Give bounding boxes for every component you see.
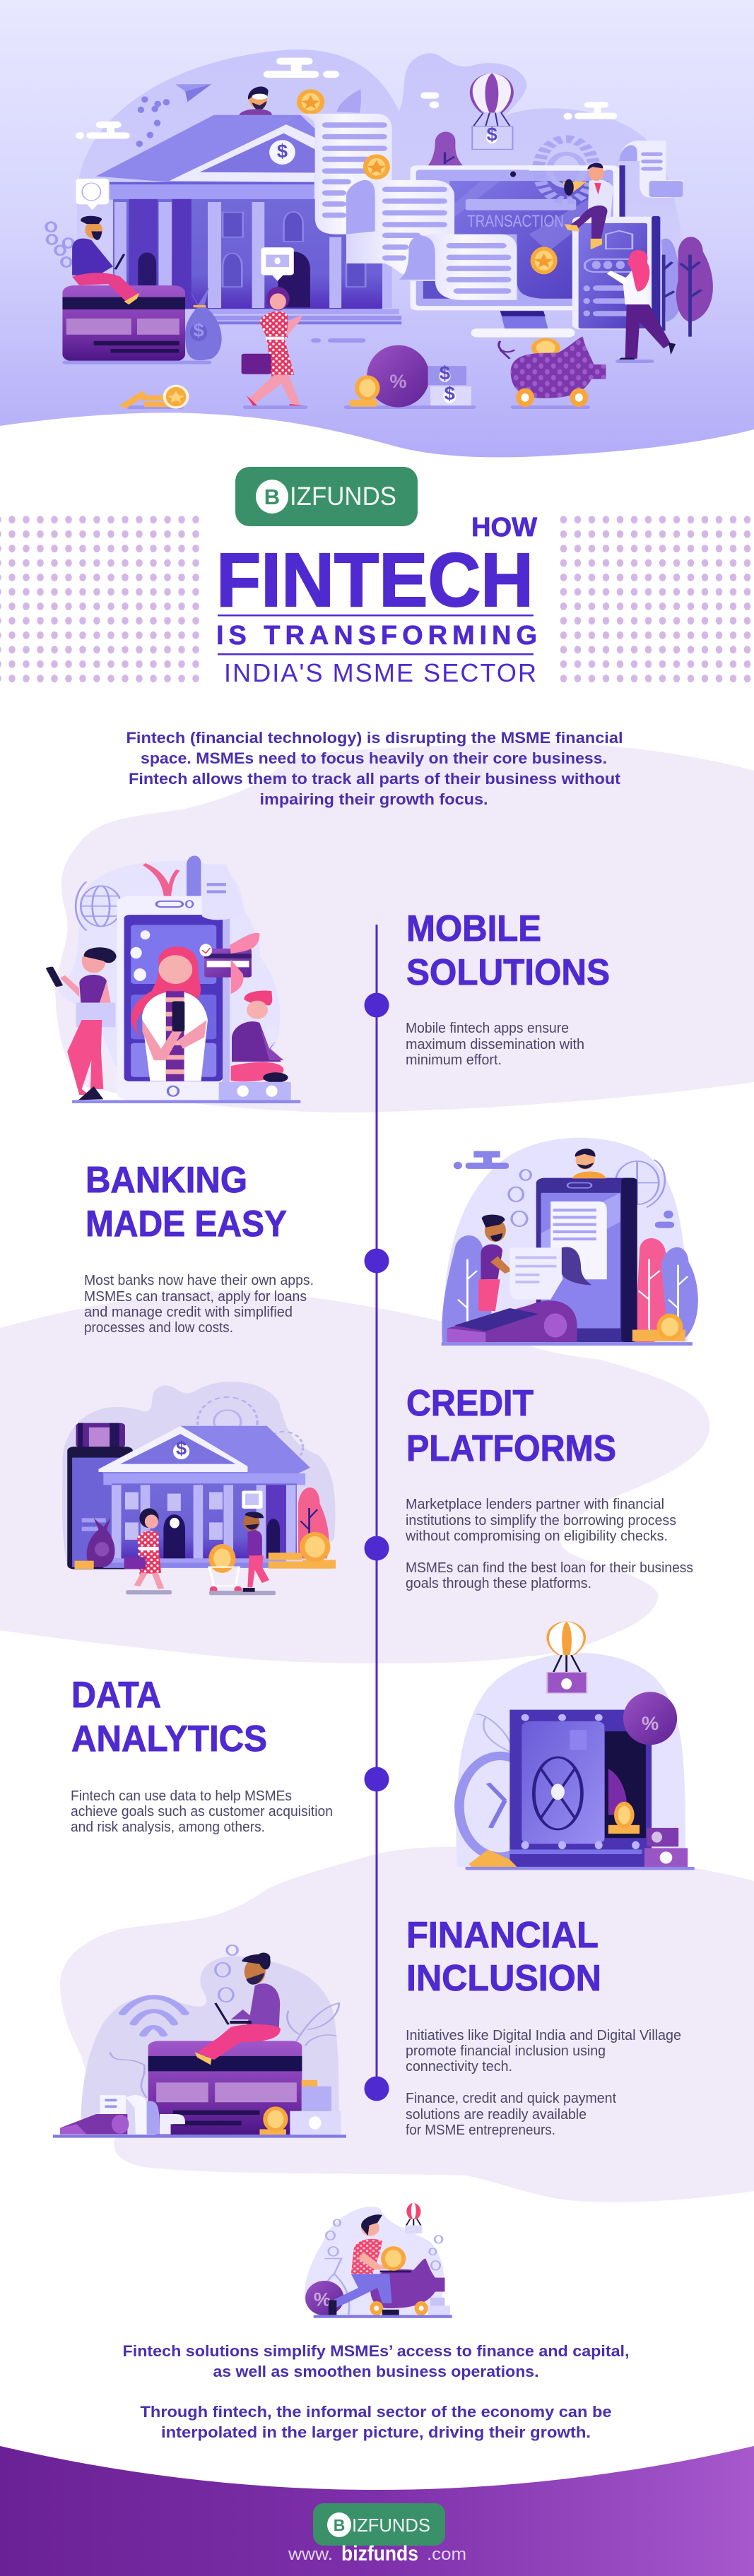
intro text: [126, 729, 623, 808]
heading: credit platforms: [406, 1383, 616, 1469]
intro text: space. MSMEs need to focus heavily on their core business.: [141, 749, 607, 767]
text: credit platforms: MSMEs can find the best loan for their business: [406, 1560, 693, 1576]
logo: Bizfunds: IZFUNDS: [290, 482, 396, 511]
phone: [572, 216, 660, 329]
backdrop dome: [456, 1653, 685, 1867]
heading: financial inclusion: [406, 1915, 601, 1999]
scroll 2: [346, 180, 454, 278]
dot pattern left: [0, 514, 203, 689]
bubble: cash: [261, 247, 294, 281]
white wave: [0, 412, 754, 468]
trees: [442, 1235, 698, 1342]
heading: data analytics: [71, 1675, 267, 1759]
text: financial inclusion: Initiatives like Digital India and Digital Village: [406, 2028, 681, 2043]
backdrop: [81, 1957, 339, 2135]
footer url: .com: [427, 2545, 466, 2564]
wifi icon: [123, 1997, 185, 2035]
money bag outline: [324, 2259, 349, 2315]
backdrop: [305, 2207, 444, 2315]
dollar chips: [130, 930, 150, 981]
coins: [269, 1532, 336, 1569]
bank building: [110, 182, 401, 324]
cash: [428, 2298, 450, 2315]
timeline dots: [365, 993, 389, 2101]
backdrop dome: [444, 1138, 688, 1342]
money bag: [185, 287, 222, 360]
receipt on phone: [550, 1201, 607, 1279]
coin icons: [216, 1945, 237, 2002]
footer url: bizfunds: [341, 2542, 418, 2565]
man: [242, 1491, 269, 1592]
text: financial inclusion: Finance, credit and quick payment: [406, 2091, 616, 2106]
bank roof and pediment: $: [277, 140, 288, 162]
footer url: [288, 2542, 466, 2565]
trees: [661, 237, 713, 337]
card: [199, 944, 252, 978]
text: credit platforms: without compromising on eligibility checks.: [405, 1529, 668, 1544]
dot pattern right: [558, 514, 754, 689]
illustration: banking made easy: [442, 1138, 698, 1346]
cash stack: $: [440, 362, 450, 384]
text: credit platforms: Marketplace lenders partner with financial: [406, 1497, 664, 1512]
heading: credit platforms: CREDIT: [406, 1383, 534, 1424]
balloon: [405, 2202, 422, 2233]
money bag: [87, 1518, 115, 1567]
receipt front: [509, 1247, 591, 1300]
coins: [469, 1849, 517, 1867]
cash stack: $: [444, 382, 455, 404]
text: data analytics: [71, 1788, 333, 1835]
coin on scroll: [363, 154, 558, 274]
percent badge: %: [389, 370, 407, 392]
paper plane: [175, 84, 211, 102]
closing text: Fintech solutions simplify MSMEs’ access to finance and capital,: [123, 2342, 629, 2360]
footer url: www.: [288, 2545, 333, 2564]
text: banking made easy: [84, 1273, 314, 1336]
cash: [644, 1828, 688, 1867]
title: FINTECH: [216, 537, 534, 622]
text: financial inclusion: for MSME entrepreneurs.: [406, 2123, 555, 2138]
monitor: [410, 165, 625, 338]
intro text: Fintech allows them to track all parts of their business without: [129, 770, 621, 788]
clouds: [76, 58, 617, 139]
title: HOW: [471, 513, 537, 542]
gears: [198, 1397, 303, 1464]
text: credit platforms: [405, 1497, 693, 1591]
background blob 3: [60, 1846, 754, 2202]
cash: [290, 2080, 341, 2135]
heading: data analytics: DATA: [71, 1675, 161, 1716]
cash: [219, 1082, 291, 1100]
phone: [536, 1178, 637, 1342]
coin: [297, 89, 324, 114]
heading: financial inclusion: FINANCIAL: [406, 1915, 599, 1956]
phone: [117, 896, 230, 1100]
percent badge: [623, 1692, 677, 1745]
man: [329, 2214, 399, 2315]
POS machine: [447, 1300, 577, 1342]
receipt: [201, 865, 243, 920]
text: data analytics: Fintech can use data to help MSMEs: [71, 1788, 292, 1804]
woman: [124, 1508, 172, 1594]
closing text: as well as smoothen business operations.: [213, 2363, 538, 2380]
woman with pink hair: [607, 250, 676, 361]
footer logo: [313, 2503, 445, 2546]
globe: [615, 1160, 665, 1207]
closing text: [123, 2342, 629, 2441]
text: credit platforms: institutions to simplify the borrowing process: [406, 1513, 676, 1529]
man on roof: [239, 87, 272, 116]
coin by percent: [350, 375, 380, 407]
bank roof and pediment: [96, 115, 315, 182]
background blob 2: [0, 1290, 709, 1663]
text: financial inclusion: solutions are readily available: [406, 2107, 587, 2123]
text: data analytics: and risk analysis, among others.: [71, 1820, 265, 1835]
text: banking made easy: processes and low costs.: [84, 1320, 233, 1336]
illustration: credit platforms: [62, 1382, 336, 1595]
man with megaphone: [562, 163, 613, 249]
leaves: [476, 1714, 509, 1752]
heading: banking made easy: MADE EASY: [86, 1204, 287, 1245]
heading: banking made easy: [86, 1160, 287, 1245]
bubble: globe: [76, 179, 109, 210]
clock: [454, 1752, 546, 1861]
footer logo: B: [334, 2516, 345, 2534]
boy seated: [231, 991, 288, 1083]
text: banking made easy: and manage credit with simplified: [84, 1305, 293, 1320]
heading: banking made easy: BANKING: [86, 1160, 247, 1201]
coin icons: [326, 2219, 442, 2270]
hot air balloon: $: [487, 123, 497, 145]
credit card: [62, 285, 185, 362]
scroll 1: [293, 114, 392, 235]
heading: mobile solutions: [406, 908, 610, 993]
purple tree top: [428, 132, 463, 165]
text: credit platforms: goals through these platforms.: [406, 1576, 591, 1591]
text: banking made easy: MSMEs can transact, apply for loans: [84, 1289, 307, 1305]
money bag: $: [193, 319, 204, 341]
illustration: data analytics safe: [454, 1621, 695, 1870]
closing text: Through fintech, the informal sector of the economy can be: [140, 2403, 612, 2421]
intro text: Fintech (financial technology) is disrupting the MSME financial: [126, 729, 623, 747]
title: INDIA'S MSME SECTOR: [224, 658, 536, 687]
text: data analytics: achieve goals such as customer acquisition: [71, 1804, 333, 1820]
hero illustration: bank and fintech scene: [0, 0, 754, 468]
percent badge: %: [642, 1712, 659, 1734]
book: [76, 1423, 125, 1447]
man with laptop: [195, 1953, 281, 2065]
text: financial inclusion: [406, 2028, 681, 2138]
percent badge: %: [314, 2288, 331, 2310]
heading: mobile solutions: SOLUTIONS: [406, 952, 610, 993]
heading: mobile solutions: MOBILE: [406, 908, 541, 949]
piggy: [370, 2259, 444, 2315]
bank: [99, 1426, 310, 1568]
text: mobile solutions: minimum effort.: [406, 1052, 502, 1068]
phone: [67, 1447, 133, 1569]
scroll 3: [399, 235, 517, 300]
coins pile left: [119, 385, 189, 409]
woman center: [131, 946, 208, 1081]
cash stack: [428, 362, 471, 405]
title: IS TRANSFORMING: [216, 621, 537, 651]
transaction label: TRANSACTION: [467, 212, 564, 231]
intro text: impairing their growth focus.: [260, 790, 488, 808]
pink tree: [298, 1488, 329, 1558]
bag and coins in safe: [608, 1769, 640, 1834]
leaves: [110, 2003, 339, 2098]
logo: Bizfunds: [235, 467, 418, 526]
illustration: mobile solutions: [45, 855, 300, 1103]
text: mobile solutions: maximum dissemination with: [406, 1037, 584, 1052]
scrolled rings: [46, 222, 73, 267]
globe: [76, 882, 121, 931]
plant and receipt: [144, 865, 178, 896]
card: [148, 2041, 302, 2135]
illustration: closing man with piggy bank: [305, 2202, 452, 2318]
coin: [259, 2106, 288, 2135]
percent badge: [305, 2281, 344, 2315]
text: financial inclusion: promote financial inclusion using: [406, 2043, 606, 2059]
safe: [509, 1710, 652, 1867]
backdrop: [59, 861, 280, 1066]
coin icons: [509, 1170, 531, 1226]
text: financial inclusion: connectivity tech.: [406, 2059, 512, 2075]
background blob 1: [55, 742, 754, 1112]
receipt printer: [60, 2095, 185, 2135]
footer logo: IZFUNDS: [352, 2515, 430, 2536]
text: mobile solutions: Mobile fintech apps ensure: [406, 1021, 569, 1036]
small scroll: [619, 141, 683, 198]
footer band: [0, 2446, 754, 2576]
man with laptop on card: [72, 216, 141, 304]
man left: [478, 1215, 512, 1311]
gear: [538, 139, 594, 201]
piggy bank: [499, 337, 606, 407]
bank: $: [176, 1437, 187, 1459]
text: banking made easy: Most banks now have their own apps.: [84, 1273, 314, 1288]
title: [216, 513, 537, 687]
man on top: [572, 1148, 606, 1178]
backdrop: [62, 1382, 335, 1567]
coin: [381, 2246, 406, 2271]
woman in red dress: [242, 287, 304, 408]
background blob: [77, 49, 693, 322]
percent badge: [367, 345, 430, 408]
left woman: [45, 947, 117, 1100]
closing text: interpolated in the larger picture, driving their growth.: [161, 2423, 591, 2441]
cart: [208, 1544, 276, 1595]
cloud: [454, 1151, 674, 1228]
small ground marks: [62, 338, 654, 409]
text: mobile solutions: [406, 1021, 584, 1068]
coins: [632, 1314, 685, 1341]
logo: Bizfunds: B: [264, 485, 280, 509]
balloon: [547, 1621, 587, 1693]
heading: data analytics: ANALYTICS: [71, 1719, 267, 1759]
heading: financial inclusion: INCLUSION: [406, 1958, 601, 1999]
timeline line: [376, 925, 377, 2089]
hot air balloon: [470, 73, 514, 149]
heading: credit platforms: PLATFORMS: [406, 1428, 616, 1469]
illustration: financial inclusion: [53, 1945, 346, 2138]
